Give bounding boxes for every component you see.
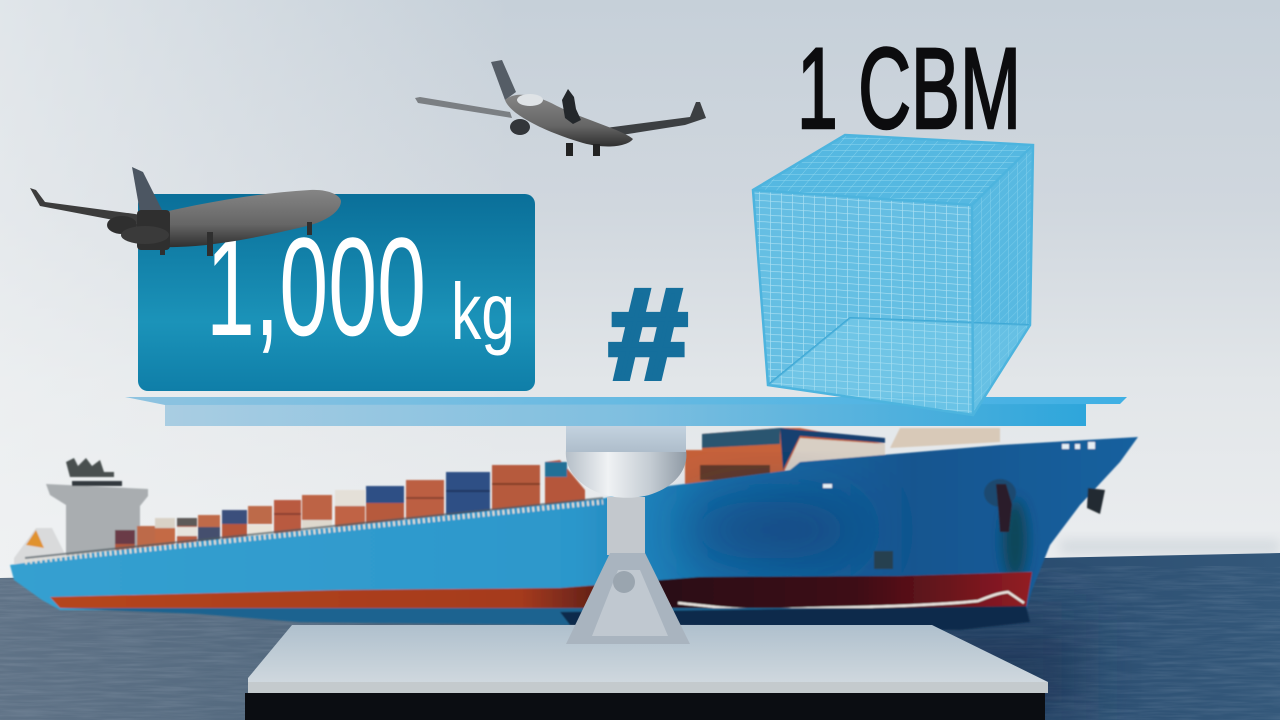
bow shading xyxy=(680,500,860,560)
scale base on table xyxy=(245,625,1048,720)
red waterline band xyxy=(50,572,1032,612)
1,000 value: 1,000 xyxy=(206,208,426,365)
small airplane xyxy=(415,60,706,156)
hull xyxy=(10,437,1138,612)
plane wing xyxy=(30,188,165,225)
container ship xyxy=(10,428,1138,630)
wireframe cube xyxy=(753,135,1033,415)
large airplane xyxy=(30,167,341,256)
bow markings xyxy=(823,442,1095,488)
plane engine xyxy=(107,210,312,256)
weight display panel xyxy=(138,194,535,391)
cube front face xyxy=(753,190,973,415)
cube top face xyxy=(753,135,1033,205)
plane tail xyxy=(132,167,162,212)
kg unit: kg xyxy=(451,267,515,356)
plane fuselage xyxy=(127,190,341,247)
sea xyxy=(0,553,1280,720)
hull underside xyxy=(60,608,1026,625)
deck rail xyxy=(25,498,603,562)
ship superstructure xyxy=(14,458,148,565)
aft container stacks xyxy=(115,460,585,553)
scale beam xyxy=(125,397,1127,426)
balance scale xyxy=(125,397,1127,720)
1 CBM label: 1 CBM xyxy=(797,25,1021,153)
anchor xyxy=(874,479,1105,569)
bow wake line xyxy=(678,592,1024,610)
not-equal symbol: # xyxy=(607,263,685,406)
cube inner edges xyxy=(768,318,1030,385)
table top xyxy=(248,625,1048,693)
forward container stacks xyxy=(685,428,1000,484)
table pedestal xyxy=(245,693,1045,720)
scale column xyxy=(566,425,690,644)
cube right face xyxy=(972,145,1033,415)
